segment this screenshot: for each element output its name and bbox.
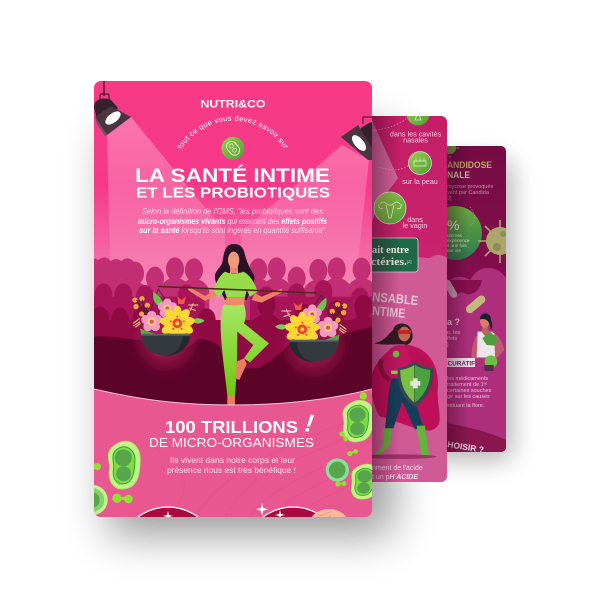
text block: fragment: ffets (447, 336, 458, 342)
text block: mycose: 0] (447, 196, 452, 202)
label: cavités nasales: nasales (403, 136, 428, 144)
spotlight: right (341, 117, 372, 160)
label: cavités nasales (390, 131, 441, 142)
label: le vagin: dans (407, 215, 423, 224)
heading: candidose vaginale (447, 162, 492, 178)
text block: acide: t un pH ACIDE (372, 474, 418, 481)
icon: nose in circle (406, 116, 430, 126)
text block: WHO definition (138, 207, 328, 235)
panel: main front card (94, 81, 372, 517)
icon: brain (309, 509, 349, 541)
text block: bénéfique (167, 455, 296, 475)
subheading: micro-organismes: DE MICRO-ORGANISMES (149, 435, 314, 450)
icon: capsules (447, 280, 486, 314)
text block: médicaments: gir sur les causes (447, 394, 490, 400)
top (213, 272, 258, 298)
text block: bénéfique: présence nous est très bénéfique ! (167, 465, 296, 475)
figure: boxing woman (472, 313, 504, 371)
label: curatif (446, 358, 475, 368)
label: le vagin (403, 216, 427, 230)
text block: acide (372, 465, 423, 481)
banner: choisir: HOISIR ? (447, 439, 485, 455)
arms (187, 287, 283, 303)
light beams (107, 117, 369, 290)
sign: green blackboard: ait entre (372, 244, 409, 256)
midriff (224, 297, 245, 305)
heading: candidose vaginale: ANDIDOSE (447, 160, 492, 171)
shadow cast by middle card (447, 146, 469, 452)
text block: WHO definition: sur la santé lorsqu'ils sont ingérés en quantité suffisante”. (139, 226, 327, 235)
heading: indispensable santé intime (372, 292, 418, 318)
label: cavités nasales: dans les cavités (390, 130, 441, 138)
label: curatif: CURATIF (448, 360, 475, 368)
stat circle: percent of women: expérience (447, 238, 470, 243)
stat circle: percent of women: eur vie (447, 248, 461, 253)
text block: mycose: vent par Candida (447, 190, 490, 196)
icon: small green virus at top (447, 146, 459, 158)
circle: bottom right (243, 507, 343, 600)
curved tagline: tout ce que vous devez savoir sur (178, 116, 288, 149)
infographic: stack of three cards (80, 81, 527, 564)
title: LA SANTÉ INTIME (135, 164, 330, 187)
heading: indispensable santé intime: NTIME (372, 303, 406, 321)
cloud: lower pale panel (372, 254, 447, 482)
icon: sparkle (256, 503, 268, 516)
text block: médicaments: les médicaments (447, 376, 489, 382)
hanging basket: right (275, 295, 347, 362)
carrying pole (158, 286, 317, 293)
heading fragment: a ? (447, 317, 460, 327)
stat circle: percent of women (447, 206, 482, 260)
stat circle: percent of women: ommes (447, 233, 463, 238)
stat: 100 trillions (165, 409, 315, 438)
dashed connector (470, 207, 475, 226)
spotlight glow behind baskets (139, 313, 341, 373)
text block: WHO definition: Selon la définition de l'OMS, “les probiotiques sont des (142, 207, 323, 216)
logo: Nutri&Co: NUTRI&CO (200, 98, 266, 110)
crowd silhouettes (78, 257, 379, 408)
banner: choisir (447, 423, 506, 452)
stat circle: percent of women: s une fois (447, 243, 467, 248)
foot (227, 358, 247, 405)
figure: superheroine with shield (372, 324, 440, 459)
trousers (221, 304, 269, 395)
text block: fragment: e, les (447, 330, 460, 336)
icon: candida virus (478, 220, 506, 263)
panel: back card on candidosis (447, 146, 506, 452)
cloud: dark top shape (445, 280, 482, 294)
icon: skin in circle (408, 152, 432, 174)
text block: médicaments: certaines souches (447, 388, 492, 394)
text block: médicaments: traitement de 1ʳᵉ (447, 381, 487, 388)
spotlight: left (94, 81, 131, 136)
text block: fragment: ] (447, 342, 449, 348)
stat: 100 trillions: ! (303, 409, 315, 438)
figure: woman in tree pose (187, 244, 283, 405)
text block: acide: nment de l'acide (372, 465, 423, 472)
shadow cast by main card (372, 116, 400, 482)
label: le vagin: le vagin (403, 221, 427, 230)
title (135, 164, 330, 202)
bacteria cluster: right (326, 392, 381, 500)
face (228, 252, 239, 273)
text block: médicaments: stituant la flore. (447, 403, 485, 409)
title: ET LES PROBIOTIQUES (136, 185, 330, 202)
bacteria cluster: left (78, 439, 144, 515)
stat: 100 trillions: 100 TRILLIONS (165, 417, 298, 437)
circle: bottom left (118, 507, 218, 600)
text block: WHO definition: micro-organismes vivants qui exercent des effets positifs (138, 217, 328, 226)
text block: mycose (447, 184, 493, 202)
panel: middle card on protection (372, 116, 447, 482)
text block: mycose: mycose provoquée (447, 184, 493, 190)
text block: bénéfique: Ils vivent dans notre corps et leur (170, 455, 295, 465)
figure: background silhouette (372, 120, 398, 222)
sign: green blackboard (372, 238, 418, 272)
heading: indispensable santé intime: NSABLE (372, 289, 419, 308)
stat circle: percent of women: % (447, 217, 459, 233)
icon: probiotic badge (221, 137, 244, 160)
text block: fragment (447, 330, 460, 348)
cloud: pink background (447, 268, 506, 452)
sign: green blackboard: [2] (407, 259, 411, 264)
text block: médicaments (447, 376, 492, 409)
dashed connector (372, 118, 409, 170)
bottom panel (94, 389, 372, 517)
label: sur la peau: sur la peau (402, 177, 438, 186)
icon: uterus in circle (374, 192, 406, 224)
wavy pattern (140, 410, 372, 517)
hair (215, 244, 254, 300)
sign: green blackboard: ctéries. (371, 256, 407, 268)
hanging basket: left (132, 289, 205, 356)
heading: candidose vaginale: NALE (447, 170, 470, 181)
card shadow (108, 130, 512, 535)
